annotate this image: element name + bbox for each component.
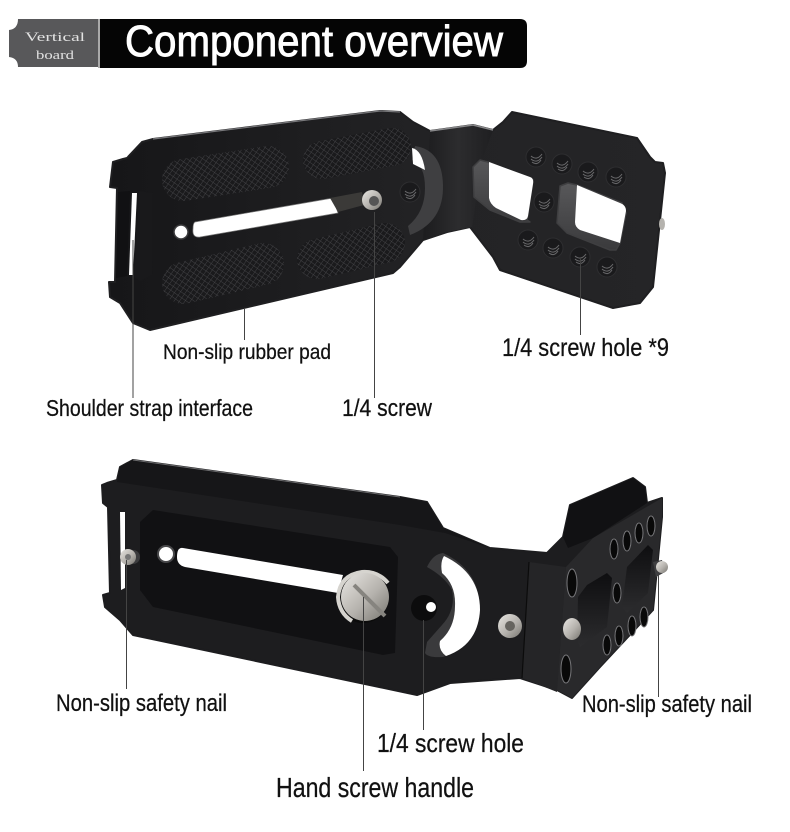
side windows: [577, 573, 612, 647]
strap slot: [129, 193, 137, 275]
label: 1/4 screw: 1/4 screw: [342, 395, 433, 422]
mounting slot: [177, 548, 343, 593]
label: 1/4 screw hole *9: 1/4 screw hole *9: [502, 334, 669, 362]
threaded hole: [400, 182, 420, 202]
long mounting slot: [193, 198, 338, 237]
plate body: [109, 111, 665, 330]
title banner: [9, 17, 527, 68]
side face: [522, 562, 566, 692]
rubber pads: [183, 147, 392, 283]
label: Non-slip safety nail right: Non-slip safety nail: [582, 691, 752, 718]
plate body: [102, 460, 662, 698]
banner tab: Vertical board: board: [36, 47, 75, 62]
safety nail left: [126, 550, 140, 564]
banner heading: Component overview: Component overview: [125, 17, 503, 66]
crescent slot: [425, 553, 480, 657]
label: Non-slip rubber pad: Non-slip rubber pad: [163, 341, 331, 364]
photo: front view of vertical board: [102, 460, 668, 698]
right nub: [659, 218, 665, 230]
hand screw handle: [337, 571, 389, 623]
nine threaded holes: [518, 147, 626, 277]
silver side screws: [563, 618, 581, 640]
top screw: [330, 192, 364, 212]
recessed panel: [140, 510, 398, 655]
callout leader lines: [126, 212, 658, 771]
banner tab: Vertical board: Vertical: [25, 29, 86, 44]
threaded hole: [411, 595, 437, 621]
banner tab: Vertical board: [9, 19, 99, 67]
label: Shoulder strap interface: Shoulder strap interface: [46, 395, 253, 421]
label: Non-slip safety nail left: Non-slip safety nail: [56, 690, 227, 717]
label: 1/4 screw hole: 1/4 screw hole: [377, 728, 524, 758]
side holes: [561, 516, 655, 683]
curved slot: [408, 146, 443, 235]
rectangular windows: [473, 160, 533, 222]
label: Hand screw handle: Hand screw handle: [276, 772, 474, 803]
strap slot: [120, 512, 125, 590]
photo: top view of vertical board: [109, 111, 665, 330]
hex bolt: [498, 614, 522, 638]
upper lip: [117, 460, 490, 548]
